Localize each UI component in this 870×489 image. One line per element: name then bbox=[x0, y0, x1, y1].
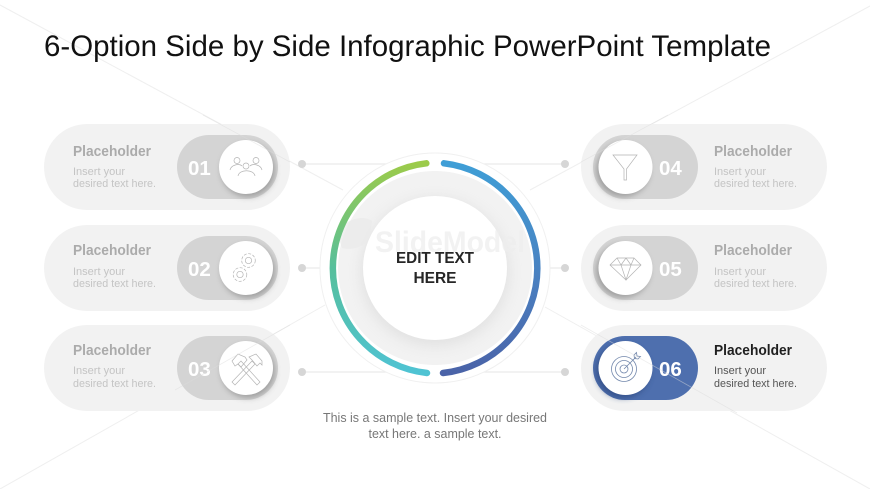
text: option 02 bbox=[73, 266, 156, 290]
heading: option 05: Placeholder bbox=[714, 243, 792, 259]
panel: option 04 bbox=[581, 124, 827, 210]
text: option 04: Insert your bbox=[714, 166, 766, 178]
heading: option 02: Placeholder bbox=[73, 243, 151, 259]
icon: people bbox=[230, 158, 262, 176]
text: option 01 bbox=[73, 166, 156, 190]
panel: option 06 bbox=[581, 325, 827, 411]
central circle bbox=[320, 153, 550, 383]
center label bbox=[396, 250, 475, 287]
watermark bbox=[340, 218, 525, 259]
number 04: 04 bbox=[659, 157, 682, 180]
number 03: 03 bbox=[188, 358, 211, 381]
title: 6-Option Side by Side Infographic PowerPoint Template bbox=[44, 30, 771, 63]
text: option 05: Insert your bbox=[714, 266, 766, 278]
text: option 04 bbox=[714, 166, 797, 190]
text: option 06: desired text here. bbox=[714, 378, 797, 390]
connector lines and dots bbox=[298, 160, 569, 376]
caption bbox=[323, 411, 547, 441]
icon: target bbox=[612, 352, 640, 382]
heading: option 01: Placeholder bbox=[73, 144, 151, 160]
heading: option 06: Placeholder bbox=[714, 343, 792, 359]
center label: EDIT TEXT bbox=[396, 250, 475, 267]
text: option 04: desired text here. bbox=[714, 178, 797, 190]
text: option 05: desired text here. bbox=[714, 278, 797, 290]
text: option 05 bbox=[714, 266, 797, 290]
text: option 06 bbox=[714, 365, 797, 390]
text: option 01: Insert your bbox=[73, 166, 125, 178]
heading: option 03: Placeholder bbox=[73, 343, 151, 359]
watermark: SlideModel bbox=[375, 226, 525, 259]
panel: option 03 bbox=[44, 325, 290, 411]
heading: option 04: Placeholder bbox=[714, 144, 792, 160]
number 02: 02 bbox=[188, 258, 211, 281]
panel: option 05 bbox=[581, 225, 827, 311]
panel: option 02 bbox=[44, 225, 290, 311]
text: option 01: desired text here. bbox=[73, 178, 156, 190]
icon: gears bbox=[233, 254, 255, 281]
icon: hammers bbox=[232, 354, 262, 385]
number 01: 01 bbox=[188, 157, 211, 180]
icon: funnel bbox=[613, 155, 637, 180]
text: option 03: Insert your bbox=[73, 365, 125, 377]
diagonal line overlay bbox=[175, 115, 737, 413]
text: option 03 bbox=[73, 365, 156, 390]
text: option 02: Insert your bbox=[73, 266, 125, 278]
arc: left gradient bbox=[333, 163, 427, 373]
text: option 02: desired text here. bbox=[73, 278, 156, 290]
caption: This is a sample text. Insert your desired bbox=[323, 411, 547, 425]
center label: HERE bbox=[413, 270, 457, 287]
icon: diamond bbox=[610, 258, 641, 280]
panel: option 01 bbox=[44, 124, 290, 210]
number 06: 06 bbox=[659, 358, 682, 381]
arc: right gradient bbox=[443, 163, 537, 373]
text: option 03: desired text here. bbox=[73, 378, 156, 390]
text: option 06: Insert your bbox=[714, 365, 766, 377]
number 05: 05 bbox=[659, 258, 682, 281]
caption: text here. a sample text. bbox=[368, 427, 502, 441]
